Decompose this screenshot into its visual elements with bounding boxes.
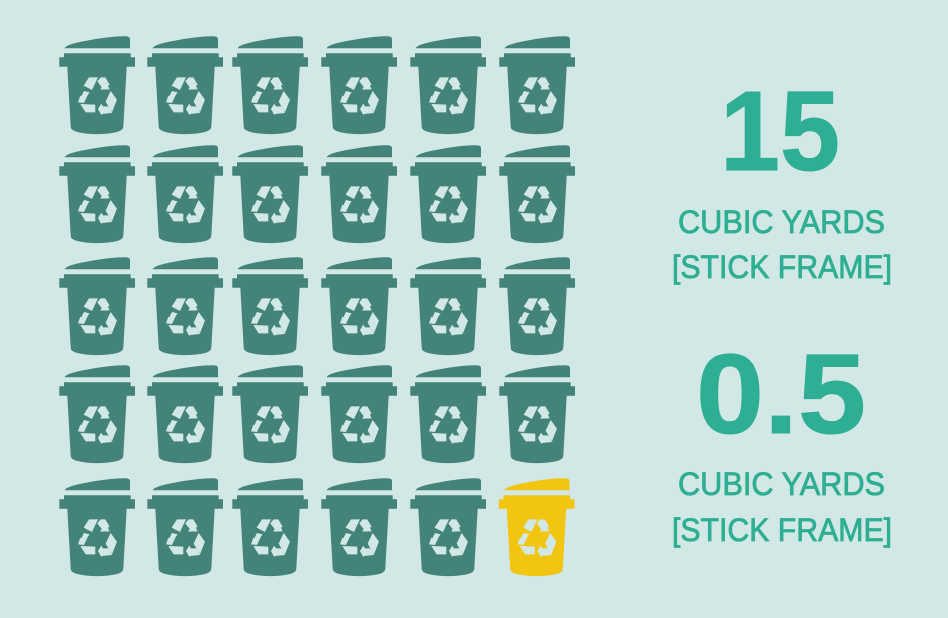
pictogram grid: recycling bins: [59, 36, 575, 576]
row 4 bins: [59, 365, 575, 463]
label: stick frame: [STICK FRAME]: [672, 249, 892, 285]
stat: 15 cubic yards: [672, 68, 892, 285]
row 3 bins: [59, 257, 575, 355]
big number 0.5: 0.5: [696, 331, 866, 457]
stat: 0.5 cubic yards: [672, 331, 892, 548]
icon: highlighted yellow bin: [499, 478, 574, 576]
row 5 bins: [59, 478, 486, 576]
row 1 bins: [59, 36, 575, 134]
label: stick frame: [STICK FRAME]: [672, 512, 892, 548]
row 2 bins: [59, 145, 575, 243]
label: cubic yards: CUBIC YARDS: [678, 466, 885, 502]
label: cubic yards: CUBIC YARDS: [678, 204, 885, 240]
big number 15: 15: [720, 68, 840, 194]
